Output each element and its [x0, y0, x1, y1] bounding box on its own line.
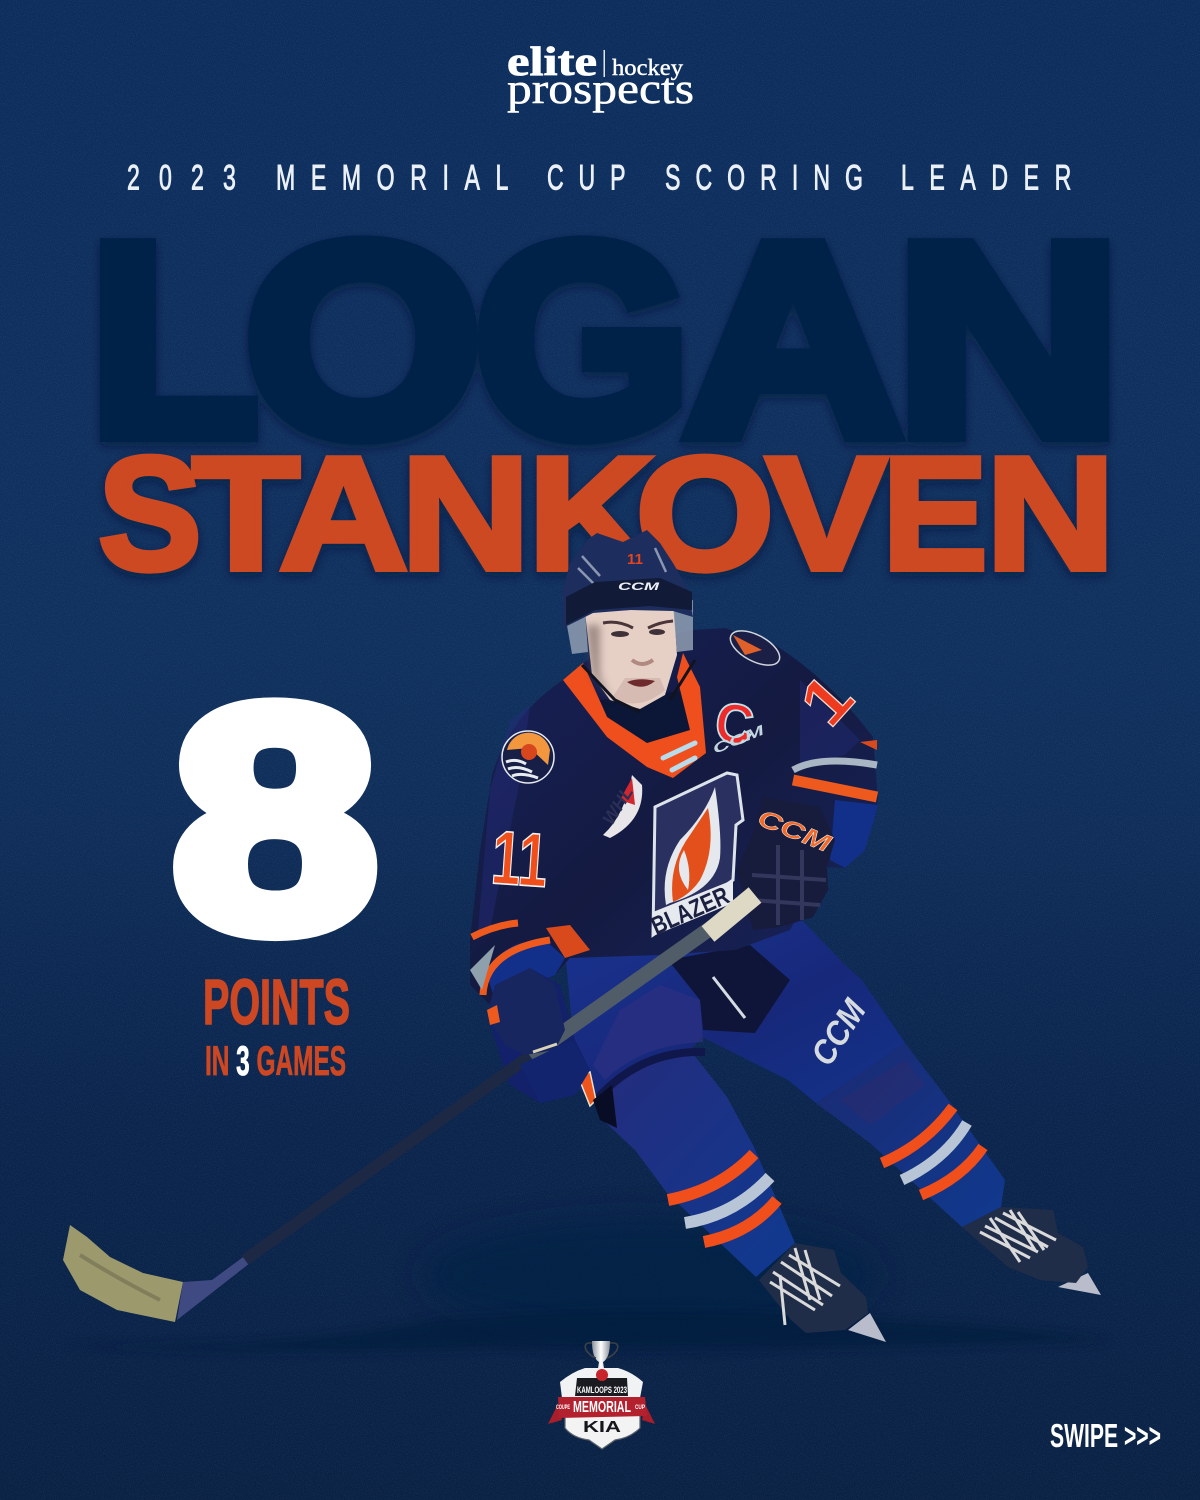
- neck: [600, 690, 692, 748]
- heading: last name STANKOVEN: [98, 424, 1115, 604]
- stubble: [612, 678, 665, 703]
- ice shadows: [60, 1220, 1110, 1351]
- heading: last name STANKOVEN: K: [528, 424, 654, 604]
- heading: first name LOGAN: A: [684, 187, 902, 492]
- heading: memorial cup scoring leader: 2023: [127, 159, 236, 198]
- trophy: [585, 1341, 618, 1368]
- face: [585, 608, 677, 709]
- right skate: [962, 1207, 1101, 1295]
- face shading: [586, 625, 612, 702]
- pants brand: CCM: [804, 992, 874, 1072]
- stat label: in 3 games: IN 3 GAMES: [205, 1037, 346, 1084]
- ribbon tails: [548, 1404, 655, 1424]
- Cup text: CUP: [635, 1405, 645, 1411]
- WHL patch: WHL: [598, 783, 637, 828]
- heading: last name STANKOVEN: S: [98, 424, 201, 604]
- shoulder number: 1: [785, 660, 867, 739]
- visor sides: [562, 597, 693, 654]
- stat label: points: POINTS: [203, 966, 350, 1038]
- stick shaft upper: [530, 925, 715, 1056]
- heading: memorial cup scoring leader: [127, 159, 1071, 198]
- jersey: [470, 624, 878, 1005]
- helmet: [562, 530, 693, 628]
- right glove: [737, 797, 836, 930]
- knee shadow band: [596, 1052, 705, 1100]
- helmet number: 11: [627, 551, 643, 568]
- heading: last name STANKOVEN: E: [882, 424, 988, 604]
- heading: memorial cup scoring leader: SCORING: [665, 159, 863, 198]
- Blazers crest: [647, 773, 743, 940]
- chin strap: [582, 660, 695, 712]
- poppy: [596, 1369, 608, 1381]
- stick: [63, 895, 755, 1322]
- logo: elite hockey prospects: hockey: [612, 55, 684, 80]
- WHL patch: [598, 775, 642, 838]
- logo: elite hockey prospects: prospects: [507, 66, 694, 113]
- helmet brand: CCM: [618, 581, 660, 593]
- right shoulder patch: [725, 624, 785, 672]
- lower sleeve blue: [487, 800, 878, 1000]
- logo: elite hockey prospects: elite: [507, 38, 597, 84]
- heading: first name LOGAN: N: [896, 187, 1121, 492]
- dark fold between legs: [668, 945, 790, 1033]
- heading: memorial cup scoring leader: CUP: [547, 159, 626, 198]
- stick shaft lower: [245, 1056, 530, 1260]
- heading: last name STANKOVEN: T: [192, 424, 300, 604]
- red banner: [558, 1397, 647, 1418]
- logo: elite hockey prospects: [507, 38, 694, 113]
- Memorial Cup logo: [548, 1341, 655, 1449]
- sleeve number: 11: [489, 815, 551, 904]
- sleeve stripes left: [472, 923, 550, 995]
- heading: last name STANKOVEN: A: [279, 424, 408, 604]
- collar lace bars: [663, 743, 695, 770]
- Memorial text: MEMORIAL: [573, 1399, 631, 1416]
- mouth: [627, 679, 655, 687]
- left glove: back of hand: [487, 968, 590, 1103]
- nose: [632, 660, 653, 664]
- Kamloops text: KAMLOOPS 2023: [577, 1385, 627, 1395]
- heading: last name STANKOVEN: V: [766, 424, 887, 604]
- head: [562, 530, 695, 712]
- heading: first name LOGAN: [90, 187, 1121, 492]
- left glove: fingers: [487, 968, 590, 1103]
- left leg with sock: [590, 1050, 795, 1277]
- heading: last name STANKOVEN: O: [636, 424, 774, 604]
- sun shoulder patch: [502, 731, 554, 783]
- heading: memorial cup scoring leader: LEADER: [901, 159, 1071, 198]
- hanging string: [713, 977, 745, 1018]
- captain C: C: [711, 689, 758, 757]
- stick blade: [63, 1225, 183, 1322]
- right leg with sock: [816, 1043, 1005, 1227]
- sleeve stripes right: [793, 780, 877, 797]
- player illustration: [63, 530, 1101, 1342]
- hip shadow: [593, 1085, 617, 1128]
- heading: first name LOGAN: L: [90, 187, 258, 492]
- Kia text: KIA: [583, 1419, 622, 1436]
- shield dark centre: [575, 1378, 628, 1396]
- left skate: [759, 1243, 886, 1342]
- jersey highlights: [478, 680, 860, 930]
- right glove: CCM: [754, 805, 836, 859]
- Coupe text: COUPE: [556, 1405, 570, 1411]
- hip pad: [578, 1072, 596, 1106]
- heading: memorial cup scoring leader: MEMORIAL: [276, 159, 508, 198]
- heading: first name LOGAN: O: [244, 187, 482, 492]
- blade tape marks: [80, 1255, 160, 1300]
- jersey brand: CCM: [710, 722, 767, 757]
- lower hem accents: [546, 925, 590, 958]
- collar: [563, 653, 706, 778]
- stat number: 8: 8: [173, 642, 377, 995]
- stick tape: [708, 895, 755, 934]
- eyes and brows: [603, 621, 673, 628]
- stick hosel: [177, 1252, 250, 1320]
- shield bottom: [565, 1415, 640, 1449]
- pants: [565, 918, 905, 1128]
- shield top: [560, 1368, 643, 1398]
- heading: last name STANKOVEN: N: [401, 424, 530, 604]
- heading: first name LOGAN: G: [475, 187, 691, 492]
- left shorts purple panel: [593, 985, 703, 1080]
- heading: last name STANKOVEN: N: [986, 424, 1115, 604]
- Blazers crest: BLAZER: [647, 882, 733, 940]
